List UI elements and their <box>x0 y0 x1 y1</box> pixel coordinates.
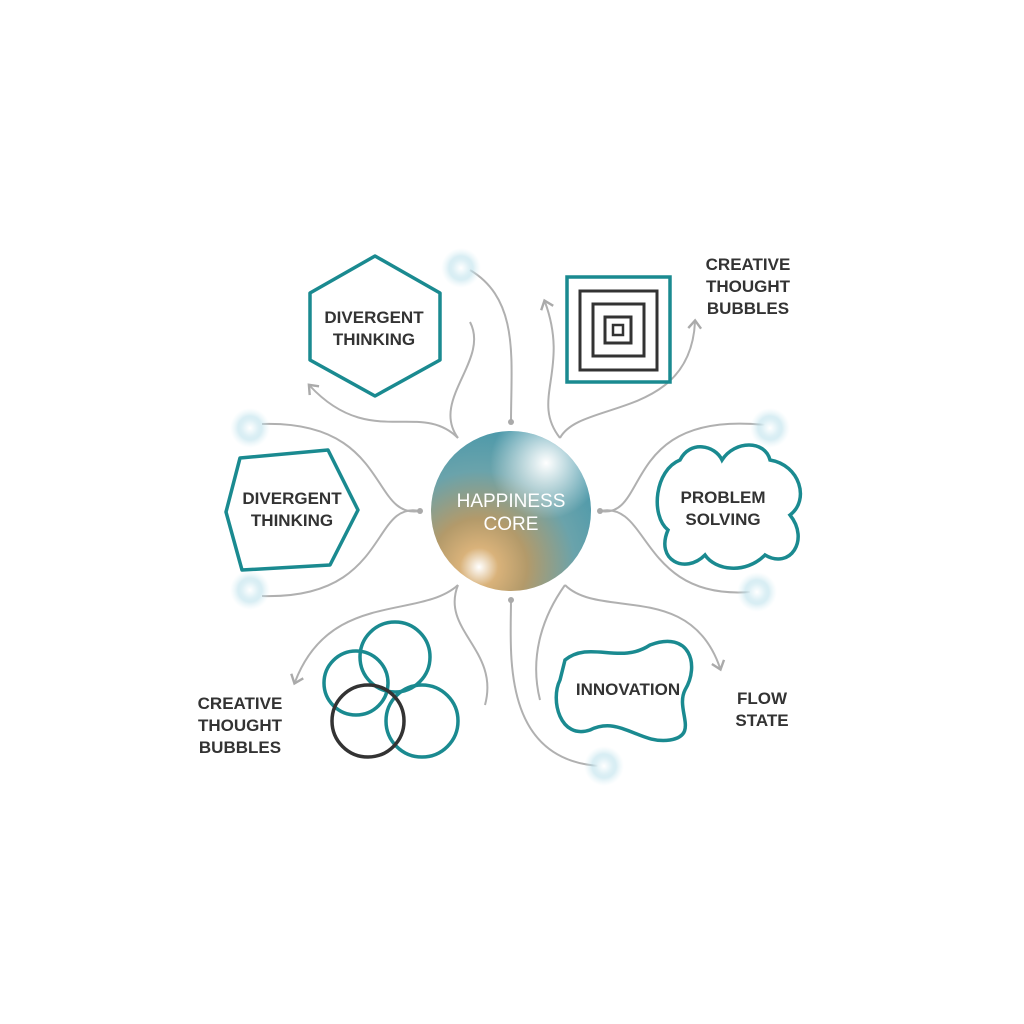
icon: overlapping circles <box>324 622 458 757</box>
label: creative thought bubbles top right <box>706 255 791 318</box>
icon: nested squares <box>567 277 670 382</box>
label: flow state: FLOW <box>737 689 788 708</box>
hexagon: divergent thinking left <box>226 450 358 570</box>
label: creative thought bubbles top right: CREATIVE <box>706 255 790 274</box>
cloud: problem solving: SOLVING <box>685 510 761 529</box>
label: creative thought bubbles top right: THOUGHT <box>706 277 791 296</box>
label: creative thought bubbles top right: BUBBLES <box>707 299 789 318</box>
label: flow state <box>735 689 789 730</box>
connector lines <box>262 270 765 766</box>
hexagon: divergent thinking left: THINKING <box>251 511 333 530</box>
hexagon: divergent thinking top: DIVERGENT <box>324 308 424 327</box>
blob: innovation <box>556 641 692 741</box>
label: creative thought bubbles bottom left <box>198 694 283 757</box>
label: flow state: STATE <box>735 711 789 730</box>
cloud: problem solving <box>657 445 800 568</box>
cloud: problem solving: PROBLEM <box>680 488 766 507</box>
hexagon: divergent thinking top <box>310 256 440 396</box>
blob: innovation: INNOVATION <box>576 680 680 699</box>
connector dots <box>417 419 603 603</box>
hexagon: divergent thinking top: THINKING <box>333 330 415 349</box>
label: creative thought bubbles bottom left: THOUGHT <box>198 716 283 735</box>
label: creative thought bubbles bottom left: BUBBLES <box>199 738 281 757</box>
glow nodes <box>230 248 790 786</box>
label: creative thought bubbles bottom left: CREATIVE <box>198 694 282 713</box>
happiness core <box>431 431 591 591</box>
hexagon: divergent thinking left: DIVERGENT <box>242 489 342 508</box>
happiness core: HAPPINESS <box>457 491 565 512</box>
happiness core: CORE <box>484 514 538 535</box>
